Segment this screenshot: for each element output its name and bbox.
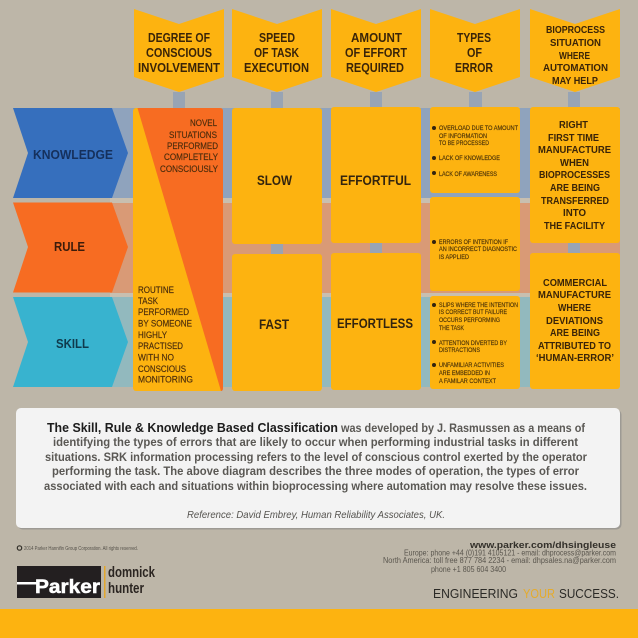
header: bioprocess situation [530, 9, 620, 92]
logo: parker domnick hunter: hunter [108, 580, 144, 597]
routine task text: ROUTINE [138, 285, 174, 295]
card: skill errors: UNFAMILIAR ACTIVITIES [439, 363, 504, 369]
contact details: phone +1 805 604 3400 [431, 565, 506, 574]
card: commercial manufacture [530, 253, 620, 389]
header: degree of conscious involvement: CONSCIOUS [146, 46, 212, 60]
card: effortless: EFFORTLESS [337, 316, 413, 331]
chevron: rule [13, 202, 128, 292]
novel situations text: PERFORMED [167, 141, 218, 151]
panel: description: Reference: David Embrey, Human Reliability Associates, UK. [187, 509, 445, 521]
header: speed of task execution: EXECUTION [244, 61, 309, 75]
panel: description: associated with each and situations within bioprocessing where automation may resolve these issues. [44, 479, 587, 493]
header: amount of effort required: AMOUNT [351, 31, 402, 45]
card: skill errors [430, 296, 520, 389]
routine task text: CONSCIOUS [138, 364, 186, 374]
header: bioprocess situation: WHERE [559, 50, 590, 62]
card: right first time: RIGHT [559, 119, 589, 131]
card: skill errors: DISTRACTIONS [439, 348, 480, 354]
card: right first time: INTO [563, 207, 586, 219]
header: bioprocess situation: MAY HELP [552, 75, 598, 87]
header: degree of conscious involvement: INVOLVEMENT [138, 61, 220, 75]
card: knowledge errors: LACK OF KNOWLEDGE [439, 156, 500, 162]
card: right first time: FIRST TIME [548, 132, 599, 144]
logo: parker domnick hunter [17, 564, 155, 598]
card: rule errors: ERRORS OF INTENTION IF [439, 240, 508, 246]
tagline [433, 587, 619, 601]
header: bioprocess situation: SITUATION [550, 37, 601, 49]
novel situations text: SITUATIONS [169, 130, 217, 140]
card: right first time: MANUFACTURE [538, 144, 611, 156]
row bands [110, 108, 620, 387]
routine task text: PRACTISED [138, 341, 183, 351]
novel situations text: NOVEL [190, 118, 217, 128]
card: knowledge errors: OF INFORMATION [439, 134, 487, 140]
tagline: YOUR [523, 587, 555, 601]
card: commercial manufacture: COMMERCIAL [543, 277, 608, 289]
header: amount of effort required: OF EFFORT [345, 46, 407, 60]
routine task text: TASK [138, 296, 158, 306]
header: amount of effort required: REQUIRED [346, 61, 404, 75]
logo: parker domnick hunter: Parker [35, 577, 101, 598]
card: skill errors: A FAMILAR CONTEXT [439, 379, 496, 385]
chevron: knowledge [13, 108, 128, 198]
card: right first time: BIOPROCESSES [539, 169, 610, 181]
card: right first time: ARE BEING [550, 182, 600, 194]
card: right first time: THE FACILITY [544, 220, 605, 232]
contact details [383, 540, 616, 574]
routine task text: PERFORMED [138, 307, 189, 317]
routine task text: BY SOMEONE [138, 318, 192, 328]
novel situations text: CONSCIOUSLY [160, 164, 218, 174]
card: effortful [331, 107, 421, 243]
card: commercial manufacture: WHERE [558, 302, 591, 314]
routine task text: MONITORING [138, 374, 193, 384]
card: right first time: WHEN [560, 157, 589, 169]
card: fast: FAST [259, 317, 290, 332]
header: bioprocess situation: BIOPROCESS [546, 24, 605, 36]
novel situations text: COMPLETELY [164, 152, 218, 162]
tagline: ENGINEERING [433, 587, 518, 601]
chevron: knowledge: KNOWLEDGE [33, 147, 113, 162]
card: knowledge errors: OVERLOAD DUE TO AMOUNT [439, 126, 518, 132]
routine task text [138, 285, 193, 384]
panel: description [16, 408, 622, 530]
card: rule errors: IS APPLIED [439, 255, 470, 261]
card: rule errors [430, 197, 520, 291]
header: speed of task execution: SPEED [259, 31, 295, 45]
card: slow [232, 108, 322, 244]
panel: description: was developed by J. Rasmussen as a means of [340, 421, 586, 435]
header: types of error [430, 9, 520, 92]
header: degree of conscious involvement [134, 9, 224, 92]
contact details: North America: toll free 877 784 2234 - email: dhpsales.na@parker.com [383, 556, 616, 565]
header: amount of effort required [331, 9, 421, 92]
panel: description: The Skill, Rule & Knowledge Based Classification [47, 421, 338, 435]
card: slow: SLOW [257, 173, 292, 188]
copyright: 2014 Parker Hannifin Group Corporation. All rights reserved. [24, 546, 138, 552]
card: rule errors: AN INCORRECT DIAGNOSTIC [439, 247, 518, 253]
header: bioprocess situation: AUTOMATION [543, 62, 608, 74]
card: commercial manufacture: DEVIATIONS [546, 315, 603, 327]
routine task text: WITH NO [138, 352, 174, 362]
header: degree of conscious involvement: DEGREE OF [148, 31, 210, 45]
panel: description: situations. SRK information processing refers to the level of conscious control exerted by the operator [45, 450, 587, 464]
card: fast [232, 254, 322, 391]
card: knowledge errors: LACK OF AWARENESS [439, 172, 497, 178]
card: commercial manufacture: ATTRIBUTED TO [538, 340, 611, 352]
chevron: rule: RULE [54, 239, 85, 254]
header: speed of task execution [232, 9, 322, 92]
footer bar [0, 609, 638, 638]
logo: parker domnick hunter: domnick [108, 564, 155, 581]
card: effortless [331, 253, 421, 390]
card: commercial manufacture: MANUFACTURE [538, 289, 611, 301]
novel situations text [160, 118, 218, 174]
card: right first time: TRANSFERRED [541, 195, 609, 207]
header: speed of task execution: OF TASK [254, 46, 299, 60]
header: types of error: ERROR [455, 61, 493, 75]
tagline: SUCCESS. [559, 587, 619, 601]
card: skill errors: OCCURS PERFORMING [439, 318, 500, 324]
header: types of error: TYPES [457, 31, 491, 45]
card: knowledge errors [430, 107, 520, 193]
card: right first time [530, 107, 620, 243]
panel: conscious involvement gradient [133, 108, 223, 391]
card: skill errors: THE TASK [439, 326, 464, 332]
card: effortful: EFFORTFUL [340, 173, 411, 188]
column connectors [173, 92, 580, 254]
card: skill errors: ARE EMBEDDED IN [439, 371, 490, 377]
header: types of error: OF [467, 46, 482, 60]
card: skill errors: IS CORRECT BUT FAILURE [439, 310, 507, 316]
card: commercial manufacture: ARE BEING [550, 327, 600, 339]
routine task text: HIGHLY [138, 330, 167, 340]
card: commercial manufacture: ‘HUMAN-ERROR’ [536, 352, 614, 364]
card: knowledge errors: TO BE PROCESSED [439, 141, 490, 147]
contact details: www.parker.com/dhsingleuse [469, 540, 616, 551]
card: skill errors: SLIPS WHERE THE INTENTION [439, 303, 518, 309]
chevron: skill: SKILL [56, 336, 89, 351]
panel: description: identifying the types of errors that are likely to occur when performing industrial tasks in different [53, 435, 578, 449]
panel: description: performing the task. The above diagram describes the three modes of operation, the types of error [52, 464, 579, 478]
chevron: skill [13, 297, 128, 387]
card: skill errors: ATTENTION DIVERTED BY [439, 341, 507, 347]
